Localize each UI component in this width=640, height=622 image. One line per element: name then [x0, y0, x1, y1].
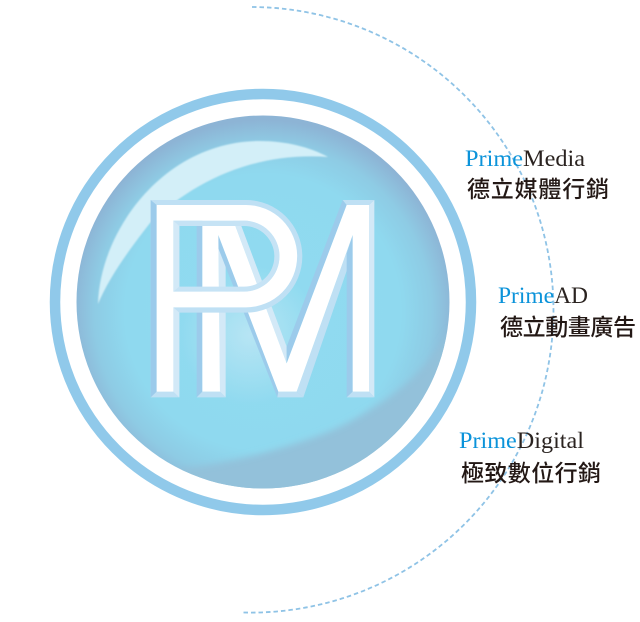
lower shadow crescent [180, 336, 446, 488]
sphere centre glow [180, 265, 320, 405]
highlight crescent [98, 141, 328, 304]
letter M [197, 200, 374, 397]
label: PrimeDigital [459, 428, 601, 486]
PrimeDigital heading: PrimeDigital [459, 428, 584, 453]
glossy sphere [76, 116, 450, 488]
label: PrimeAD [498, 283, 636, 340]
PrimeMedia Chinese name: 德立媒體行銷 [467, 176, 609, 202]
PrimeAD Chinese name: 德立動畫廣告 [500, 314, 636, 340]
dashed orbit arc [243, 7, 553, 613]
PrimeAD heading: PrimeAD [498, 283, 588, 308]
PrimeDigital Chinese name: 極致數位行銷 [461, 460, 601, 486]
PM monogram [151, 200, 374, 397]
logo emblem [55, 94, 480, 510]
PrimeMedia heading: PrimeMedia [465, 146, 585, 171]
letter P [151, 200, 302, 397]
label: PrimeMedia [465, 146, 609, 202]
outer ring [55, 94, 471, 510]
